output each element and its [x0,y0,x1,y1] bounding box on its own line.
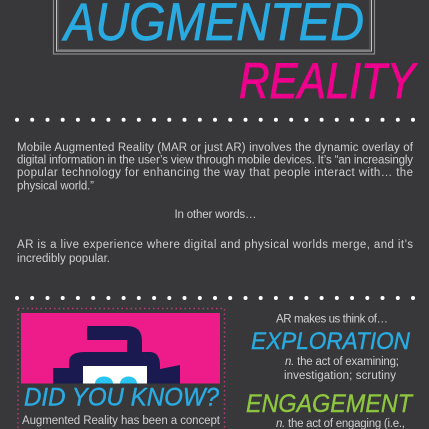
definition: exploration: n. the act of examining; [285,356,399,368]
intro text block: physical world.” [17,180,94,192]
heading: engagement: ENGAGEMENT [246,390,414,418]
definition: exploration: investigation; scrutiny [284,370,396,382]
intro text block: popular technology for enhancing the way that people interact with… the [17,167,413,179]
title frame [54,0,374,54]
dotted divider: top [15,118,415,122]
intro text block: Mobile Augmented Reality (MAR or just AR) involves the dynamic overlay of [17,142,414,154]
heading: exploration: EXPLORATION [251,328,411,355]
in other words text: In other words… [174,209,256,221]
illustration: robot on pink background [21,313,220,384]
summary text block: incredibly popular. [17,253,110,265]
intro text block: digital information in the user’s view through mobile devices. It’s “an increasingly [17,154,413,166]
panel dotted border [18,308,224,429]
definition: exploration [284,356,399,382]
summary text block: AR is a live experience where digital and physical worlds merge, and it’s [17,239,413,251]
column: AR makes us think of [246,314,414,429]
column intro: AR makes us think of… [276,314,388,326]
heading: did you know: DID YOU KNOW? [24,384,219,412]
summary text block [17,239,413,265]
intro text block [17,142,414,192]
panel body text: Augmented Reality has been a concept [22,415,221,427]
panel: did you know [18,308,224,429]
dotted divider: middle [15,296,415,300]
